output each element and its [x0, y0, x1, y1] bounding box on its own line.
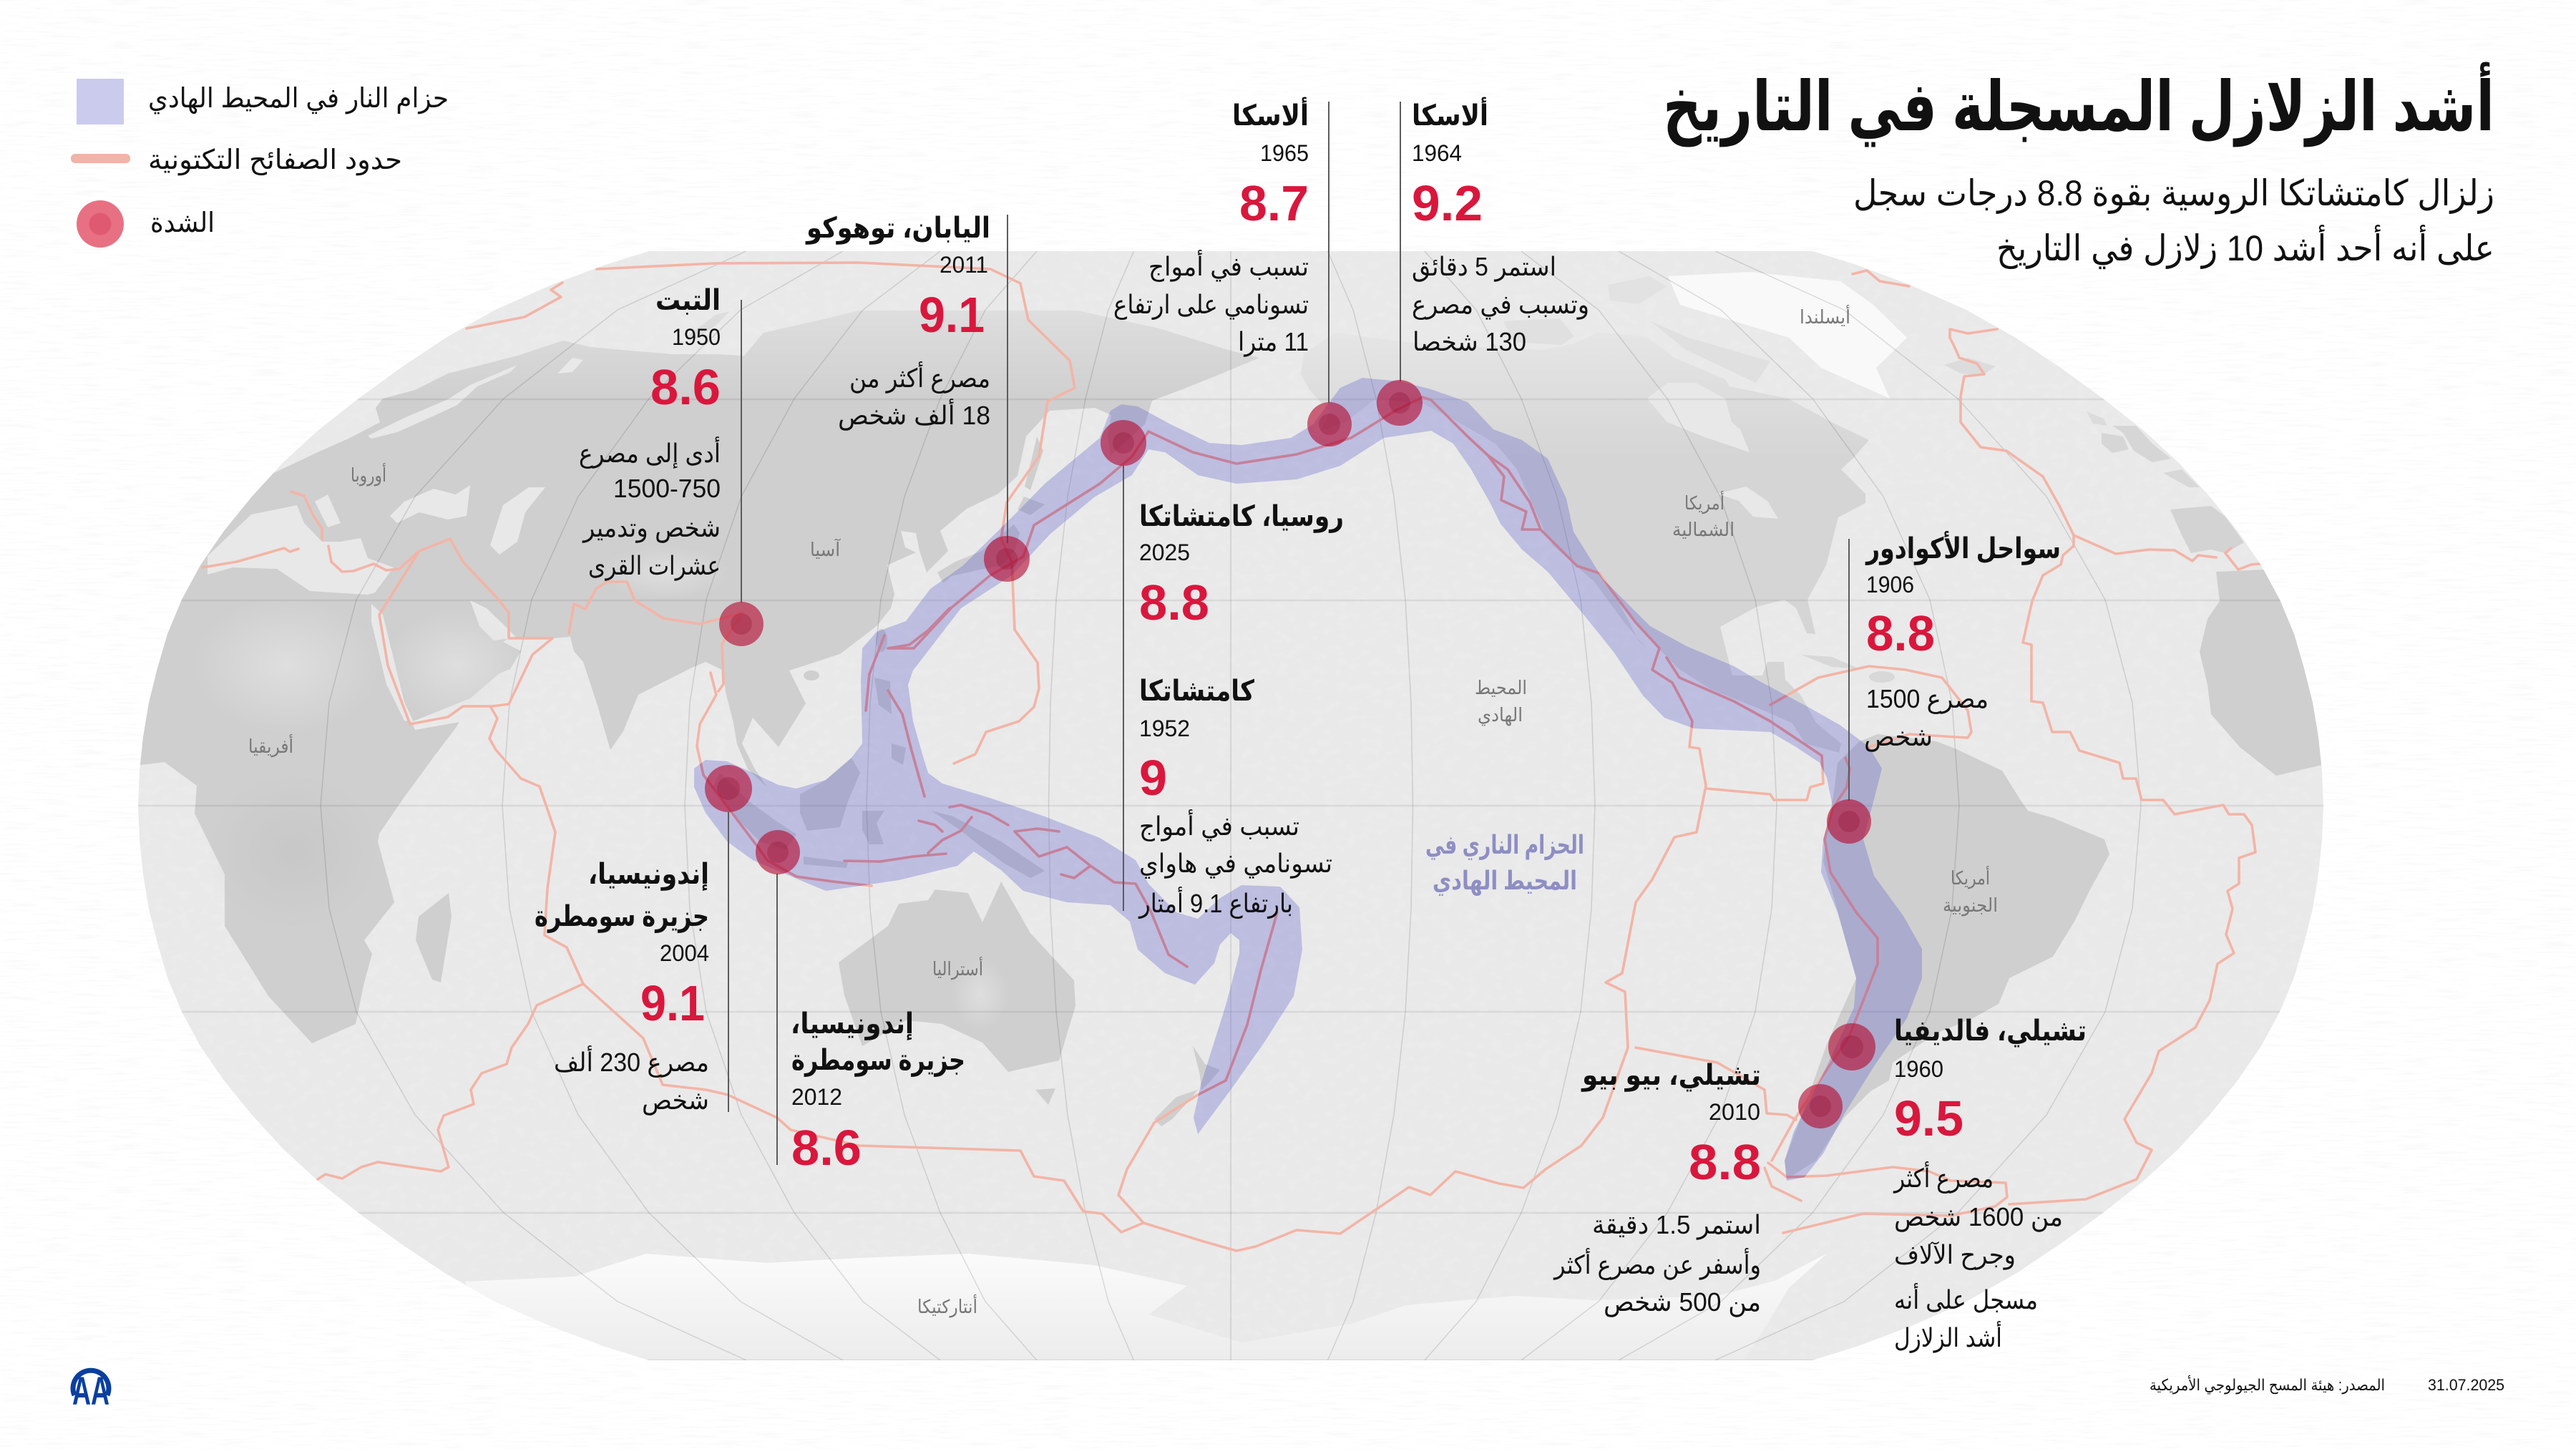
map region labels: الجنوبية	[1943, 894, 1998, 917]
callout: Ecuador coast 1906: 8.8	[1866, 605, 1935, 661]
callout: Ecuador coast 1906: سواحل الأكوادور	[1865, 530, 2061, 565]
callout: Kamchatka 1952: بارتفاع 9.1 أمتار	[1138, 887, 1293, 919]
pacific ring of fire belt	[694, 378, 1922, 1181]
subtitle: على أنه أحد أشد 10 زلازل في التاريخ	[1996, 225, 2494, 270]
icon: Anadolu Agency logo	[72, 1368, 109, 1413]
callout: Alaska 1965: 1965	[1260, 140, 1309, 166]
callout: Alaska 1965: ألاسكا	[1232, 97, 1309, 132]
date: 31.07.2025	[2428, 1376, 2504, 1394]
leader lines	[728, 102, 1849, 1165]
legend: plate boundary label: حدود الصفائح التكتونية	[148, 145, 402, 176]
callout: Indonesia Sumatra 2012: 8.6	[791, 1120, 862, 1176]
callout: Ecuador coast 1906	[1864, 530, 2061, 752]
map region labels: الهادي	[1478, 704, 1523, 726]
legend: ring of fire label: حزام النار في المحيط الهادي	[148, 84, 449, 114]
source note: المصدر: هيئة المسح الجيولوجي الأمريكية	[2150, 1375, 2385, 1395]
callout: Russia Kamchatka 2025: روسيا، كامتشاتكا	[1139, 501, 1344, 533]
callout: Indonesia Sumatra 2012: إندونيسيا،	[791, 1008, 914, 1040]
callout: Ecuador coast 1906: 1906	[1866, 572, 1914, 597]
callout: Indonesia Sumatra 2012: جزيرة سومطرة	[791, 1045, 965, 1077]
callout: Japan Tohoku 2011	[805, 213, 990, 431]
callout: Chile Valdivia 1960	[1893, 1015, 2087, 1353]
callout: Indonesia Sumatra 2004: 9.1	[640, 975, 705, 1031]
callout: Indonesia Sumatra 2004: شخص	[642, 1085, 709, 1116]
callout: Tibet 1950: عشرات القرى	[588, 551, 721, 581]
callout: Chile Valdivia 1960: أشد الزلازل	[1894, 1321, 2002, 1353]
callout: Tibet 1950: التبت	[655, 285, 721, 316]
callout: Chile Valdivia 1960: تشيلي، فالديفيا	[1894, 1015, 2087, 1048]
land masses	[86, 276, 2361, 1179]
callout: Ecuador coast 1906: مصرع 1500	[1866, 684, 1989, 714]
epicentre markers	[705, 380, 1875, 1128]
callout: Chile Bio Bio 2010: 8.8	[1689, 1134, 1761, 1190]
greenland ice	[1668, 272, 1907, 399]
plate boundaries inside belt	[700, 396, 1879, 1179]
callout: Chile Valdivia 1960: 1960	[1894, 1056, 1943, 1082]
seas and lakes	[208, 358, 1778, 722]
map region labels: أمريكا	[1951, 865, 1990, 889]
callout: Indonesia Sumatra 2004: جزيرة سومطرة	[535, 901, 709, 933]
map region labels: المحيط	[1475, 677, 1527, 698]
ring of fire map label	[1425, 830, 1584, 896]
map region labels: آسيا	[810, 538, 841, 560]
callout: Indonesia Sumatra 2004: مصرع 230 ألف	[554, 1045, 709, 1078]
ring of fire map label: المحيط الهادي	[1433, 866, 1577, 896]
legend: ring of fire swatch	[77, 79, 124, 125]
callout: Alaska 1964: ألاسكا	[1412, 97, 1488, 132]
callout: Chile Valdivia 1960: 9.5	[1894, 1091, 1963, 1146]
callout: Alaska 1965	[1113, 97, 1309, 357]
map region labels: أستراليا	[932, 956, 983, 980]
callout: Tibet 1950	[579, 285, 721, 581]
map region labels: أيسلندا	[1800, 304, 1850, 328]
terrain shading	[243, 560, 993, 1010]
callout: Chile Bio Bio 2010: 2010	[1709, 1099, 1760, 1125]
callout: Kamchatka 1952: تسونامي في هاواي	[1139, 849, 1332, 879]
legend: plate boundary line	[71, 154, 130, 163]
callout: Japan Tohoku 2011: 2011	[940, 252, 988, 278]
antarctica ice	[465, 1254, 1826, 1322]
graticule	[136, 251, 2326, 1360]
callout: Russia Kamchatka 2025	[1139, 501, 1344, 630]
tectonic plate boundaries	[203, 263, 2260, 1251]
legend	[71, 79, 449, 248]
callout: Indonesia Sumatra 2012: 2012	[791, 1084, 842, 1110]
callout: Tibet 1950: 8.6	[650, 359, 721, 415]
callout: Alaska 1965: 8.7	[1239, 175, 1309, 231]
callout: Chile Valdivia 1960: وجرح الآلاف	[1894, 1240, 2016, 1270]
callout: Russia Kamchatka 2025: 2025	[1139, 540, 1190, 565]
callout: Chile Valdivia 1960: من 1600 شخص	[1894, 1202, 2063, 1232]
ring of fire map label: الحزام الناري في	[1425, 830, 1584, 860]
callout: Chile Bio Bio 2010: تشيلي، بيو بيو	[1581, 1060, 1761, 1092]
callout: Alaska 1964: 1964	[1412, 140, 1462, 166]
callout: Japan Tohoku 2011: اليابان، توهوكو	[805, 213, 990, 245]
legend: intensity label: الشدة	[150, 208, 215, 238]
callout: Alaska 1965: 11 مترا	[1238, 327, 1309, 357]
callout: Indonesia Sumatra 2004: إندونيسيا،	[588, 859, 709, 891]
callout: Tibet 1950: شخص وتدمير	[582, 513, 721, 543]
callout: Japan Tohoku 2011: مصرع أكثر من	[849, 361, 990, 394]
map region labels: أوروبا	[351, 462, 386, 487]
legend: intensity marker	[77, 200, 124, 248]
callout: Ecuador coast 1906: شخص	[1864, 722, 1933, 752]
callout: Russia Kamchatka 2025: 8.8	[1139, 575, 1209, 630]
icon: Anadolu Agency logo: AA	[72, 1368, 109, 1413]
callout: Alaska 1965: تسونامي على ارتفاع	[1113, 290, 1309, 320]
callout: Indonesia Sumatra 2004	[535, 859, 709, 1116]
callout: Chile Bio Bio 2010: استمر 1.5 دقيقة	[1592, 1210, 1761, 1240]
map region labels: أفريقيا	[248, 733, 293, 758]
callout: Chile Valdivia 1960: مصرع أكثر	[1893, 1161, 1994, 1194]
map region labels: أنتاركتيكا	[917, 1294, 977, 1317]
map region labels: أمريكا	[1684, 490, 1724, 514]
callout: Alaska 1964: 130 شخصا	[1413, 327, 1526, 356]
callout: Alaska 1964	[1412, 97, 1589, 356]
callout: Alaska 1964: وتسبب في مصرع	[1412, 290, 1589, 320]
map region labels: الشمالية	[1672, 519, 1735, 540]
callout: Kamchatka 1952	[1138, 675, 1332, 919]
callout: Indonesia Sumatra 2012	[791, 1008, 965, 1176]
callout: Tibet 1950: أدى إلى مصرع	[579, 436, 721, 469]
callout: Kamchatka 1952: 1952	[1139, 716, 1190, 741]
subtitle	[1853, 173, 2494, 270]
world map	[86, 243, 2361, 1367]
callout: Indonesia Sumatra 2004: 2004	[660, 940, 709, 966]
callout: Alaska 1964: استمر 5 دقائق	[1412, 252, 1556, 282]
subtitle: زلزال كامتشاتكا الروسية بقوة 8.8 درجات سجل	[1853, 173, 2494, 215]
callout: Tibet 1950: 1500-750	[613, 474, 721, 503]
callout: Japan Tohoku 2011: 18 ألف شخص	[838, 399, 990, 431]
callout: Japan Tohoku 2011: 9.1	[919, 287, 985, 343]
callout: Chile Valdivia 1960: مسجل على أنه	[1894, 1283, 2038, 1314]
callout: Kamchatka 1952: 9	[1139, 750, 1167, 806]
callout: Chile Bio Bio 2010	[1553, 1060, 1761, 1317]
callout: Alaska 1965: تسبب في أمواج	[1148, 250, 1309, 282]
map region labels	[248, 304, 1998, 1317]
callout: Alaska 1964: 9.2	[1412, 175, 1483, 231]
callout: Chile Bio Bio 2010: من 500 شخص	[1604, 1287, 1761, 1317]
callout: Kamchatka 1952: تسبب في أمواج	[1139, 809, 1299, 841]
callout: Chile Bio Bio 2010: وأسفر عن مصرع أكثر	[1553, 1248, 1761, 1280]
callout: Tibet 1950: 1950	[672, 324, 721, 350]
callout: Kamchatka 1952: كامتشاتكا	[1139, 675, 1255, 707]
